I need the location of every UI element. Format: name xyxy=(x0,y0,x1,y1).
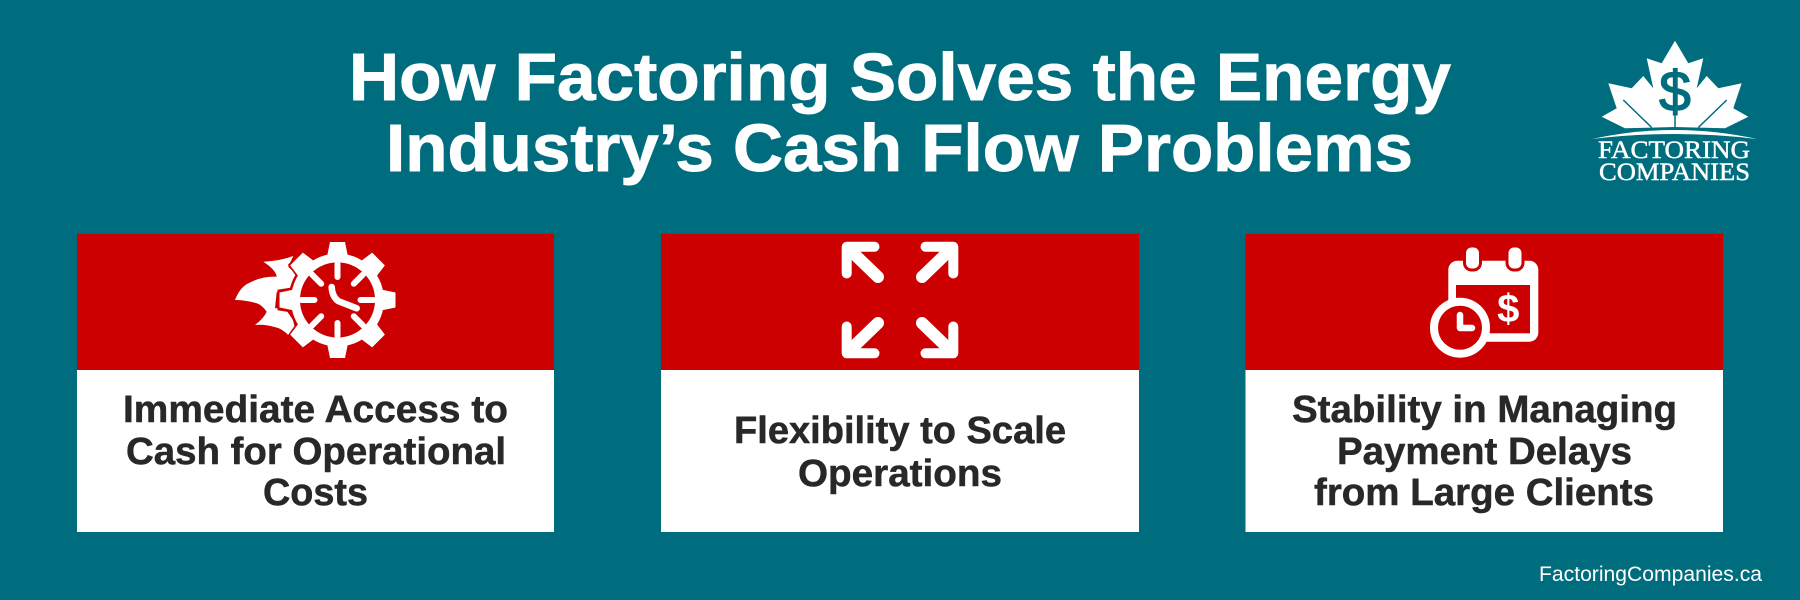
text: stability: Payment Delays xyxy=(1337,431,1632,473)
text: flexibility: Operations xyxy=(798,453,1002,495)
logo: Factoring Companies: COMPANIES xyxy=(1599,157,1750,186)
logo: Factoring Companies: $ xyxy=(1659,60,1691,124)
panel: immediate access xyxy=(77,234,554,532)
icon: expand arrows xyxy=(847,247,953,353)
icon: speeding gear clock xyxy=(235,242,396,358)
title: Industry’s Cash Flow Problems xyxy=(386,111,1413,186)
icon: calendar with clock and dollar xyxy=(1434,246,1538,354)
text: flexibility: Flexibility to Scale xyxy=(734,410,1066,452)
logo: Factoring Companies xyxy=(1592,41,1757,186)
title: How Factoring Solves the Energy xyxy=(349,40,1451,115)
title xyxy=(349,40,1451,186)
text: immediate access xyxy=(123,389,508,514)
icon: maple leaf xyxy=(1602,41,1748,128)
text: stability: from Large Clients xyxy=(1314,472,1654,514)
text: immediate access: Cash for Operational xyxy=(126,431,506,473)
footer url: FactoringCompanies.ca xyxy=(1539,562,1762,586)
icon: calendar with clock and dollar: $ xyxy=(1497,287,1519,331)
text: stability: Stability in Managing xyxy=(1292,389,1677,431)
logo: Factoring Companies: FACTORING xyxy=(1598,135,1750,164)
text: stability xyxy=(1292,389,1677,514)
text: immediate access: Immediate Access to xyxy=(123,389,508,431)
text: flexibility xyxy=(734,410,1066,495)
text: immediate access: Costs xyxy=(263,472,368,514)
panel: stability xyxy=(1246,234,1723,532)
panel: flexibility xyxy=(661,234,1139,532)
